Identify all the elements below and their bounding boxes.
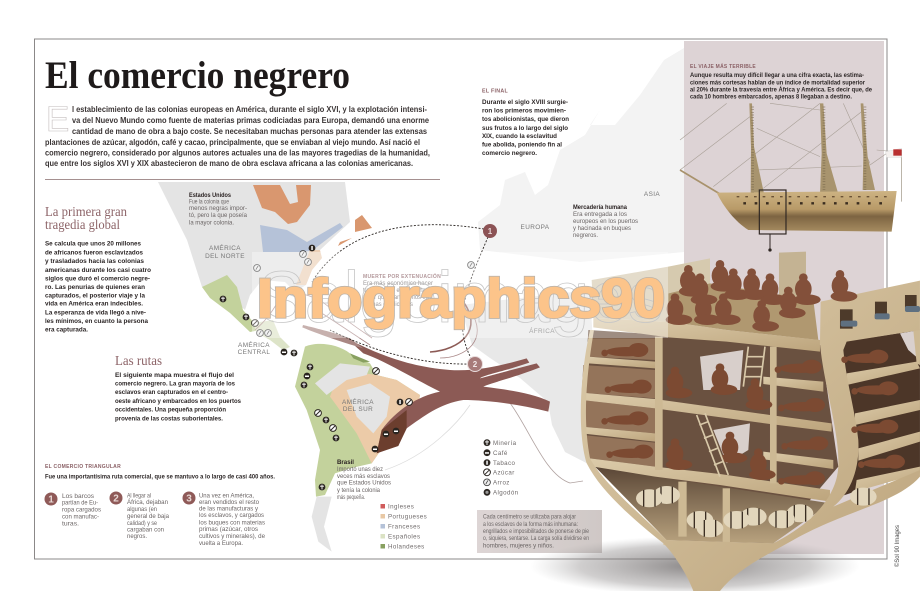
flag [886, 148, 902, 202]
callout: every centimetre: hombres, mujeres y niños. [483, 544, 554, 550]
annotation: Brasil: más pequeña. [337, 495, 365, 501]
body: La esperanza de vida llegó a nive- [45, 310, 146, 316]
legend: colonial powers [380, 504, 427, 550]
route marker 1: 1 [488, 227, 493, 236]
slave flows from Africa to the Americas [302, 325, 550, 453]
region labels: AMÉRICA [209, 243, 241, 252]
annotation: Estados Unidos: menos negras impor- [189, 206, 247, 212]
text block: el final: EL FINAL [482, 88, 508, 94]
text block: el final [482, 88, 569, 157]
body: y trasladados hacia las colonias [45, 258, 144, 265]
annotation: Estados Unidos: tó, pero la que poseía [189, 213, 248, 219]
step 3: primas (azúcar, otros [199, 527, 258, 533]
annotation: muerte por extenuación: trabajar a los esclavos hasta [363, 288, 434, 294]
legend: products: Tabaco [493, 460, 516, 467]
legend: products: Algodón [493, 490, 519, 497]
region labels [205, 191, 660, 413]
region labels: DEL NORTE [205, 253, 245, 260]
dashed triangular route [312, 225, 488, 364]
text block: el final: sus frutos a lo largo del siglo [482, 125, 568, 132]
colony: English, Hudson Bay [253, 185, 311, 224]
marker pointer [768, 234, 772, 252]
top deck surface [668, 283, 818, 340]
interior [583, 330, 838, 543]
mast rope lattice [753, 107, 865, 194]
step 2: África, dejaban [127, 499, 168, 506]
gun ports [743, 200, 887, 207]
intro text block: comercio negrero, considerado por algunos autores actuales una de las mayores tragedias de la humanidad, [45, 148, 430, 158]
hull shell [581, 281, 920, 591]
step 1: ropa cargados [62, 508, 101, 514]
step 2 [110, 492, 170, 540]
watermark [252, 252, 668, 338]
colony: French [260, 223, 343, 252]
region labels: AMÉRICA [238, 340, 270, 349]
gun ports and cannons [840, 295, 920, 329]
deck planks [582, 318, 920, 555]
annotation: Brasil: que Estados Unidos [337, 480, 391, 486]
enslaved people on the lower decks [601, 343, 905, 485]
region labels: AMÉRICA [342, 397, 374, 406]
section marker [759, 190, 786, 234]
step 3: los esclavos, y cargados [199, 513, 264, 519]
South America [295, 344, 420, 552]
intro text block [45, 100, 430, 168]
body: El siguiente mapa muestra el flujo del [115, 372, 234, 379]
text block: el viaje más terrible: Aunque resulta muy difícil llegar a una cifra exacta, las estima- [690, 72, 864, 79]
region labels: ASIA [644, 191, 660, 198]
route marker 2 [468, 356, 482, 372]
flow arrowhead over Brazil [377, 410, 407, 453]
legend: products: Minería [493, 440, 517, 447]
enslaved people on the top deck [666, 260, 857, 332]
step 2: cargaban con [127, 528, 164, 534]
step 3 [182, 492, 266, 547]
heading: La primera gran [45, 205, 127, 220]
title: El comercio negrero [45, 54, 350, 97]
annotation: mercadería humana: Mercadería humana [573, 205, 628, 211]
annotation: mercadería humana [573, 205, 638, 239]
annotation: muerte por extenuación [363, 272, 441, 308]
land: Europe and Asia [478, 48, 684, 262]
annotation: muerte por extenuación: buenas condiciones [363, 302, 413, 308]
body: occidentales. Una pequeña proporción [115, 406, 226, 414]
annotation: Brasil [337, 460, 391, 501]
heading: EL COMERCIO TRIANGULAR [45, 464, 121, 470]
annotation: muerte por extenuación: morir que mantenerlos en [363, 295, 429, 301]
body: provenía de las costas suborientales. [115, 416, 223, 422]
step 2: 2 [113, 494, 119, 504]
body [45, 240, 151, 334]
colony: Spanish North [202, 275, 260, 332]
legend: products: Café [493, 450, 508, 457]
region labels: DEL SUR [343, 406, 373, 413]
annotation: mercadería humana: europeos en los puertos [573, 219, 638, 225]
upper back wall [592, 258, 710, 322]
colony: East coast [296, 250, 322, 285]
body: vida en América eran indecibles. [45, 300, 143, 308]
body: les mínimos, en cuanto la persona [45, 318, 148, 325]
annotation: mercadería humana: y hacinada en buques [573, 226, 631, 232]
subheading: Fue una importantísima ruta comercial, que se mantuvo a lo largo de casi 400 años. [45, 474, 275, 480]
text block: el final: ron los primeros movimien- [482, 108, 566, 114]
legend: colonial powers: Franceses [388, 524, 420, 530]
ghost lettering: Salgoimages [258, 258, 663, 338]
step 3: 3 [186, 494, 192, 504]
legend: colonial powers: Españoles [388, 534, 420, 540]
columns [655, 329, 920, 585]
drop cap: E [46, 100, 69, 139]
annotation: Brasil: y tenía la colonia [337, 488, 381, 494]
step 1: Los barcos [62, 494, 94, 500]
annotation: Brasil: Brasil [337, 460, 354, 466]
body: Se calcula que unos 20 millones [45, 240, 141, 248]
text block: el viaje más terrible [690, 63, 872, 101]
intro text block: cantidad de mano de obra a bajo coste. Se necesitaban muchas personas para atender las extensas [72, 127, 428, 136]
intro text block: l establecimiento de las colonias europeas en América, durante el siglo XVI, y la explotación intensi- [72, 105, 427, 114]
colony: Dutch Guiana [350, 353, 370, 363]
legend: colonial powers: Holandeses [388, 544, 425, 550]
heading [45, 205, 127, 233]
bowsprit [680, 170, 720, 194]
annotation: muerte por extenuación: Era más económico hacer [363, 281, 433, 287]
region labels: EUROPA [521, 224, 550, 231]
open spaces showing background [700, 350, 750, 463]
barrels [636, 486, 877, 537]
illustration: ship cross-section [581, 252, 920, 591]
mast section [779, 252, 806, 310]
region labels: ÁFRICA [529, 326, 555, 335]
callout: every centimetre: o, siquiera, sentarse. La carga solía dividirse en [483, 536, 589, 542]
watermark band [252, 252, 668, 338]
annotation: muerte por extenuación: MUERTE POR EXTENUACIÓN [363, 272, 441, 280]
region labels: CENTRAL [238, 349, 270, 356]
legend: products [484, 439, 519, 497]
main flow [347, 338, 550, 453]
intro text block: va del Nuevo Mundo como fuente de materias primas codiciadas para Europa, demandó una enorme [72, 116, 430, 125]
intro divider [45, 179, 440, 180]
body: oeste africano y embarcados en los puertos [115, 398, 241, 405]
step 2: negros. [127, 534, 147, 540]
step 1: partían de Eu- [62, 500, 98, 506]
pale gap right [900, 330, 920, 360]
land: Patagonia [312, 497, 332, 552]
step 2: general de baja [127, 514, 170, 520]
route marker 2: 2 [473, 360, 478, 369]
land: Africa [460, 290, 600, 470]
body: ro. Las penurias de quienes eran [45, 284, 145, 291]
land: North America [158, 182, 350, 310]
body: esclavos eran capturados en el centro- [115, 389, 228, 396]
annotation: Brasil: Importó unas diez [337, 467, 383, 473]
legend: colonial powers: Portugueses [388, 514, 427, 520]
text block: el final: fue abolida, poniendo fin al [482, 142, 562, 148]
text block: las rutas [115, 354, 241, 422]
masts [749, 103, 875, 194]
thin route lines [255, 292, 583, 483]
text block: el final: tos abolicionistas, que dieron [482, 116, 569, 123]
step 3: de las manufacturas y [199, 506, 258, 512]
step 3: los buques con materias [199, 520, 265, 526]
step 1 [44, 492, 101, 528]
callout: every centimetre: a los esclavos de la forma más inhumana: [483, 522, 578, 528]
text block: el comercio triangular [44, 464, 275, 547]
step 1: turas. [62, 522, 79, 528]
callout: every centimetre [477, 510, 602, 553]
text block: la primera gran tragedia global [45, 205, 151, 334]
body: siglos que duró el comercio negre- [45, 276, 150, 282]
step 2: calidad) y se [127, 521, 158, 527]
step 2: algunas (en [127, 507, 157, 513]
hull [717, 191, 897, 232]
panel: world map [158, 48, 684, 552]
map product icons [220, 245, 474, 490]
legend: products: Arroz [493, 480, 510, 487]
text block: el final: Durante el siglo XVIII surgie- [482, 99, 568, 106]
body: capturados, el posterior viaje y la [45, 292, 145, 300]
colony: Central America [253, 320, 290, 350]
step 3: Una vez en América, [199, 494, 254, 500]
continent: Spanish South America [295, 344, 420, 497]
image credit: ©Sol 90 Images [894, 525, 901, 567]
step 2: Al llegar al [127, 494, 151, 500]
ladders [697, 347, 765, 477]
body: era capturada. [45, 326, 88, 334]
panel: the most terrible voyage background [684, 41, 884, 554]
text block: el viaje más terrible: EL VIAJE MÁS TERRIBLE [690, 63, 756, 70]
thin flow to the Caribbean [302, 325, 363, 348]
step 3: vuelta a Europa. [199, 541, 243, 547]
intro text block: que entre los siglos XVI y XIX abastecieron de mano de obra esclava africana a las colonias americanas. [45, 159, 413, 168]
annotation: Estados Unidos [189, 193, 248, 226]
annotation: mercadería humana: Era entregada a los [573, 212, 627, 218]
step 3: eran vendidos el resto [199, 500, 260, 506]
intro text block: plantaciones de azúcar, algodón, café y cacao, principalmente, que se enviaban al viejo mundo. Así nació el [45, 138, 420, 147]
orange lettering: Infographics90 [257, 267, 665, 329]
ground shadow of the ship section [530, 536, 860, 591]
upper gun ports [737, 195, 887, 199]
left bays [582, 338, 655, 467]
annotation: Brasil: veces más esclavos [337, 474, 390, 480]
text block: el final: comercio negrero. [482, 150, 537, 157]
body [115, 372, 241, 422]
callout: every centimetre: Cada centímetro se utilizaba para alojar [483, 515, 576, 521]
annotation: mercadería humana: negreros. [573, 233, 598, 239]
step 1: con manufac- [62, 514, 99, 520]
text block: el viaje más terrible: al 20% durante la travesía entre África y América. Es decir que, de [690, 84, 872, 93]
annotation: Estados Unidos: Estados Unidos [189, 193, 232, 199]
legend: products: Azúcar [493, 470, 515, 477]
text block: el final: XIX, cuando la esclavitud [482, 133, 557, 140]
route marker 1 [483, 224, 497, 238]
body: americanas durante los casi cuatro [45, 267, 151, 274]
body: de africanos fueron esclavizados [45, 250, 143, 256]
text block: el viaje más terrible: ciones más cortesas hablan de un índice de mortalidad superior [690, 79, 865, 86]
interior: unexplored Amazon [315, 363, 390, 433]
step 1: 1 [48, 494, 54, 506]
step 3: cultivos y minerales), de [199, 534, 266, 540]
right side interior [840, 330, 920, 497]
annotation: Estados Unidos: Fue la colonia que [189, 200, 230, 206]
callout: every centimetre: engrillados e imposibilitados de ponerse de pie [483, 529, 590, 535]
heading: Las rutas [115, 354, 162, 369]
colony: Portuguese Brazil [330, 370, 420, 463]
text block: el viaje más terrible: cada 10 hombres embarcados, apenas 8 llegaban a destino. [690, 94, 852, 101]
hold floor [595, 467, 830, 543]
body: comercio negrero. La gran mayoría de los [115, 380, 235, 388]
heading: tragedia global [45, 218, 120, 233]
colony: English, Newfoundland [338, 215, 372, 246]
annotation: Estados Unidos: la mayor colonia. [189, 220, 234, 226]
legend: colonial powers: Ingleses [388, 504, 414, 510]
rigging [680, 103, 893, 188]
illustration: sailing ship [680, 103, 902, 252]
orange lettering outline: Infographics90 [257, 267, 665, 329]
